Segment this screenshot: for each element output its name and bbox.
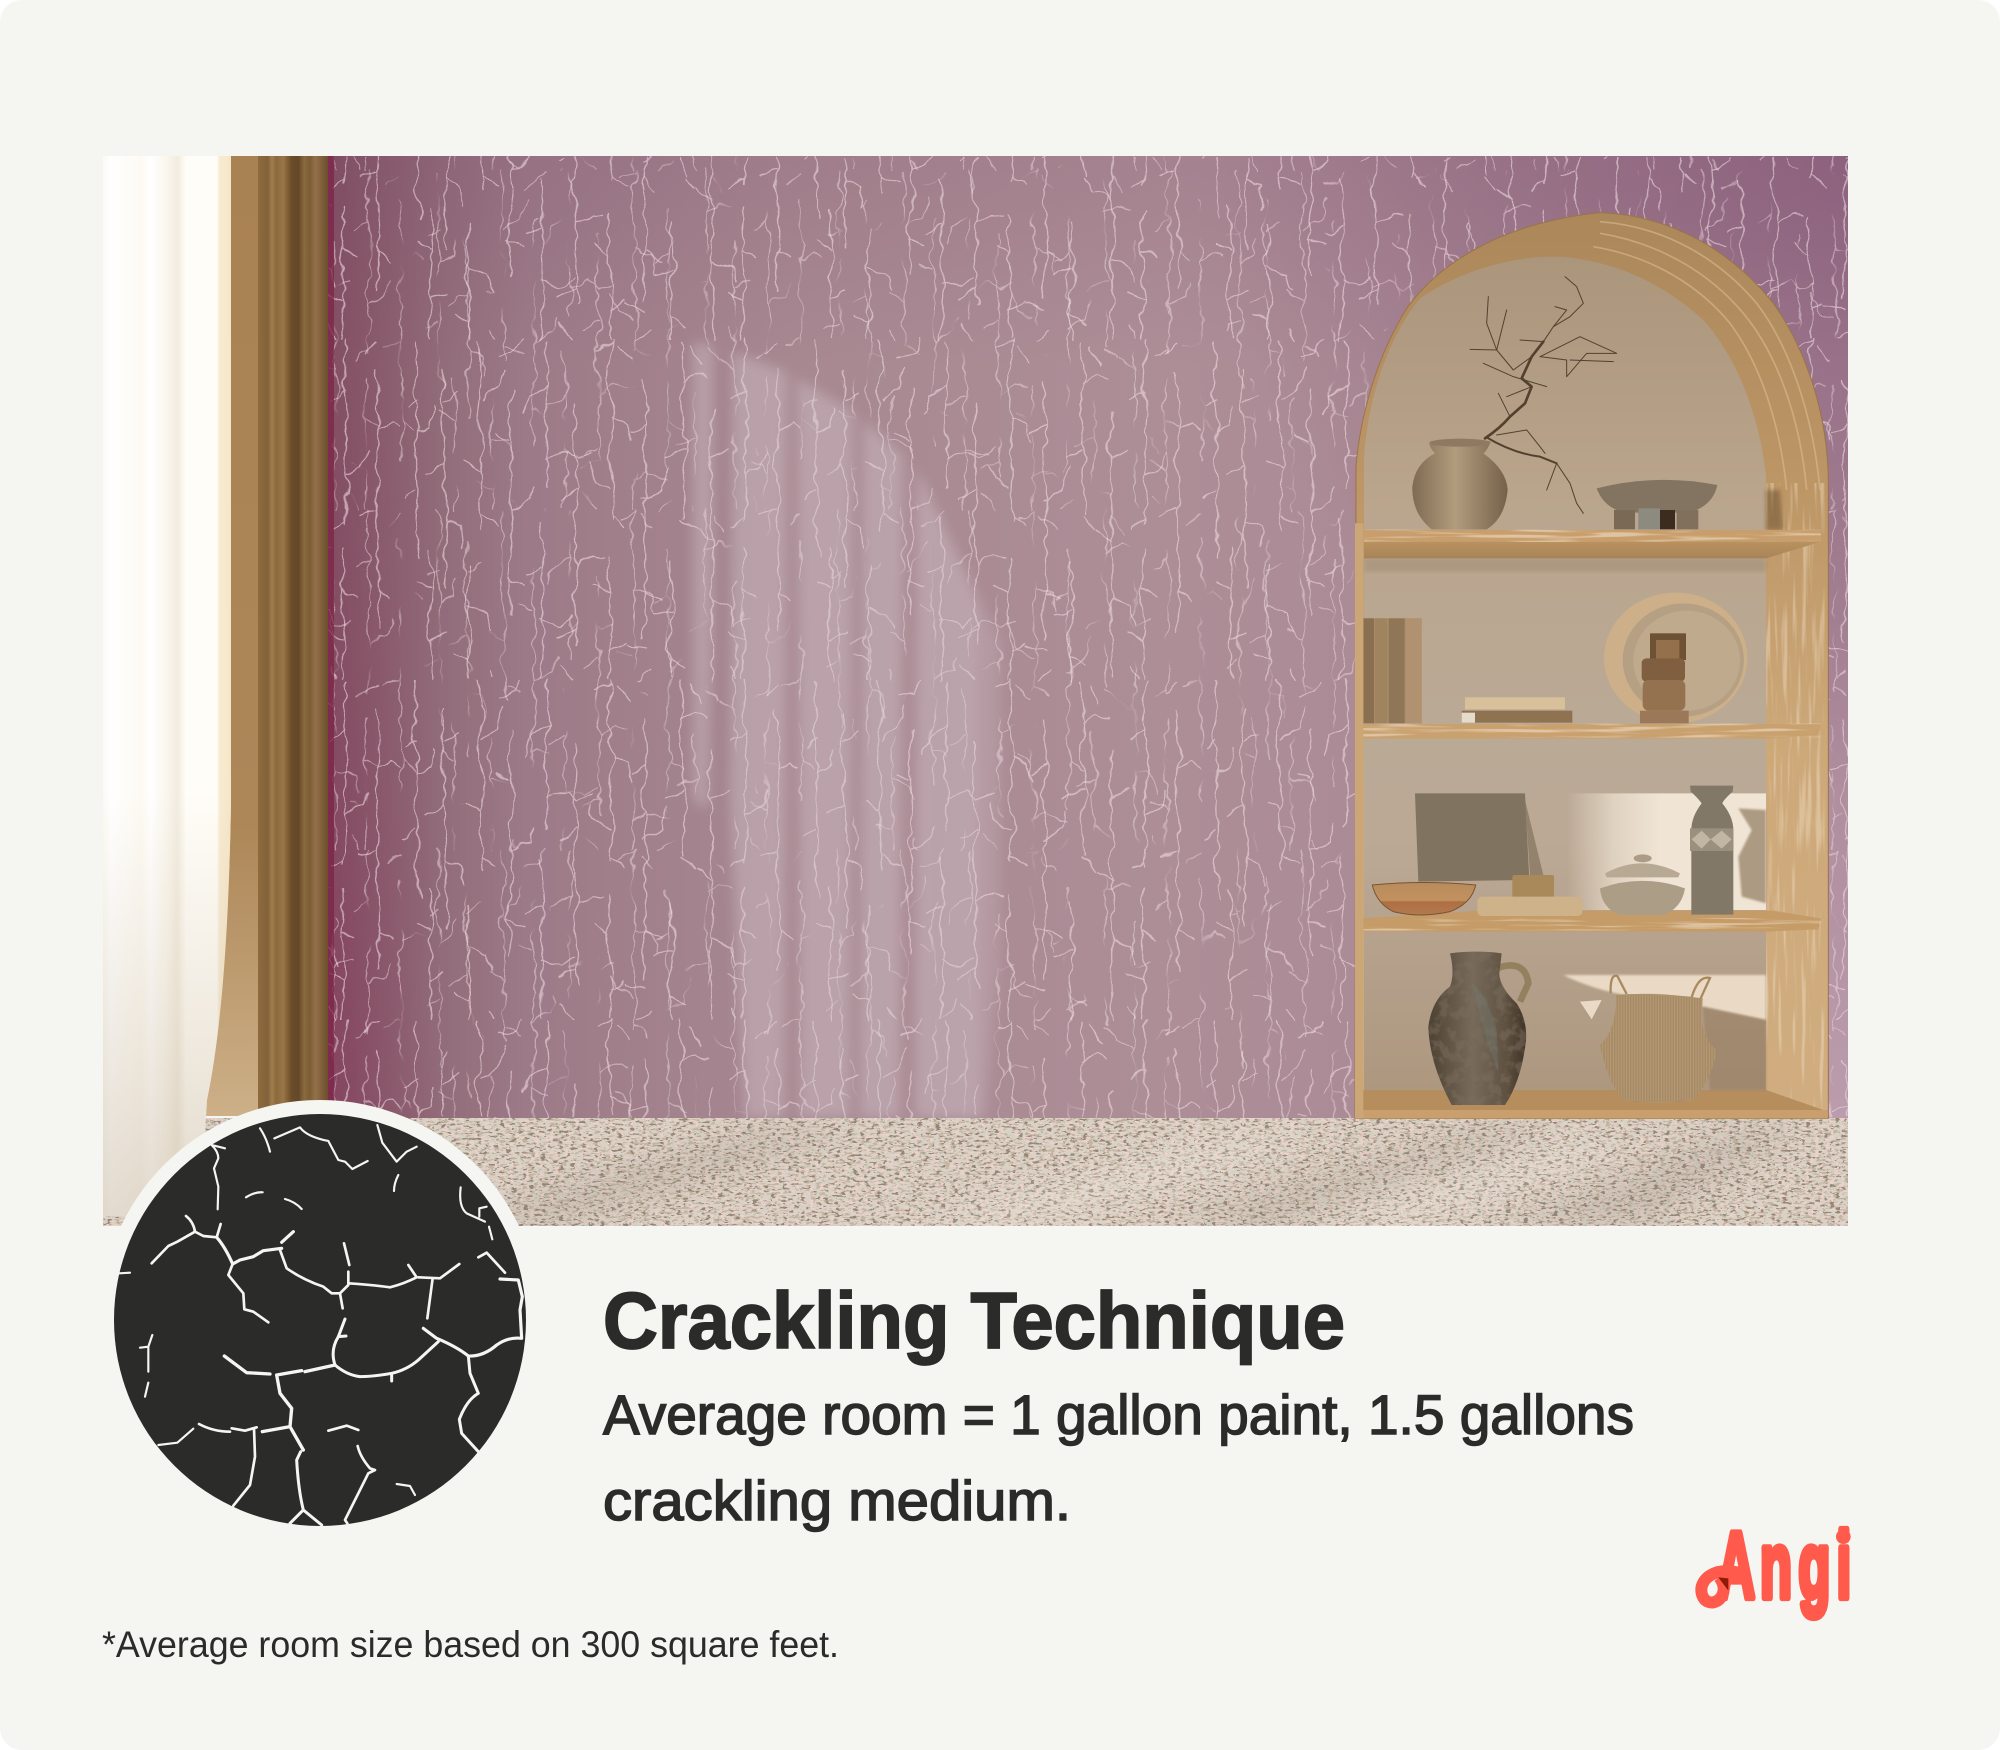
carved statue — [1640, 633, 1689, 723]
wood shadow beside top compartment — [1766, 490, 1783, 530]
bottom shelf front — [1355, 1110, 1828, 1118]
leaning board shadow — [1525, 800, 1543, 875]
upright books — [1363, 618, 1422, 723]
description line 2: crackling medium. — [603, 1469, 1071, 1532]
wood grain side panel — [1766, 483, 1824, 1113]
swatch border — [100, 1100, 540, 1540]
round clay vase — [1412, 439, 1508, 529]
arched wooden bookshelf — [1355, 213, 1828, 1118]
second shelf and objects below — [1355, 593, 1828, 1118]
arch frame — [1355, 213, 1828, 1118]
leaning board — [1415, 793, 1529, 882]
niche back wall — [1364, 257, 1766, 1090]
logo loop — [1701, 1571, 1738, 1602]
basket shadow — [1703, 1007, 1766, 1090]
swatch cracks — [119, 1125, 522, 1525]
logo dot — [1836, 1529, 1851, 1544]
description line 1: Average room = 1 gallon paint, 1.5 gallons — [603, 1383, 1634, 1446]
small cup — [1512, 875, 1554, 897]
logo: Angi — [1701, 1515, 1851, 1619]
logo wordmark: Angi — [1717, 1515, 1851, 1619]
second shelf board — [1363, 724, 1821, 739]
stacked books — [1462, 697, 1572, 723]
lidded bowl — [1600, 854, 1685, 915]
flat tray — [1477, 897, 1582, 916]
title: Crackling Technique — [603, 1276, 1345, 1365]
arch band grain — [1593, 222, 1820, 490]
wall with crackle finish — [328, 156, 1848, 1118]
dark clay jug — [1427, 950, 1530, 1107]
terrazzo floor — [103, 1118, 1848, 1226]
third shelf board — [1363, 911, 1821, 932]
swatch fill — [114, 1114, 526, 1526]
tan drape curtain — [200, 156, 328, 1116]
top shelf — [1364, 530, 1821, 558]
logo overlap — [1718, 1577, 1728, 1591]
dried branch — [1470, 277, 1617, 513]
sunlight on third compartment — [1567, 793, 1766, 910]
bottom compartment light blob — [1580, 1000, 1602, 1019]
description — [603, 1383, 1634, 1532]
photo: room with crackled pink wall — [103, 156, 1848, 1226]
crackle swatch circle — [100, 1100, 540, 1540]
woven basket — [1600, 976, 1717, 1102]
tall vase shadow — [1738, 808, 1766, 903]
sunlight on bottom compartment — [1563, 975, 1766, 1020]
shadow under top shelf — [1364, 558, 1766, 572]
window light on wall — [693, 342, 1000, 1118]
round wooden plate — [1604, 593, 1747, 723]
bottom shelf board — [1360, 1090, 1823, 1110]
sheer white curtain — [103, 156, 231, 1216]
pedestal bowl — [1597, 480, 1717, 529]
wooden bowl — [1372, 882, 1476, 915]
patterned tall vase — [1690, 786, 1733, 915]
left frame edge — [1355, 523, 1363, 1118]
footnote: *Average room size based on 300 square feet. — [102, 1624, 839, 1665]
